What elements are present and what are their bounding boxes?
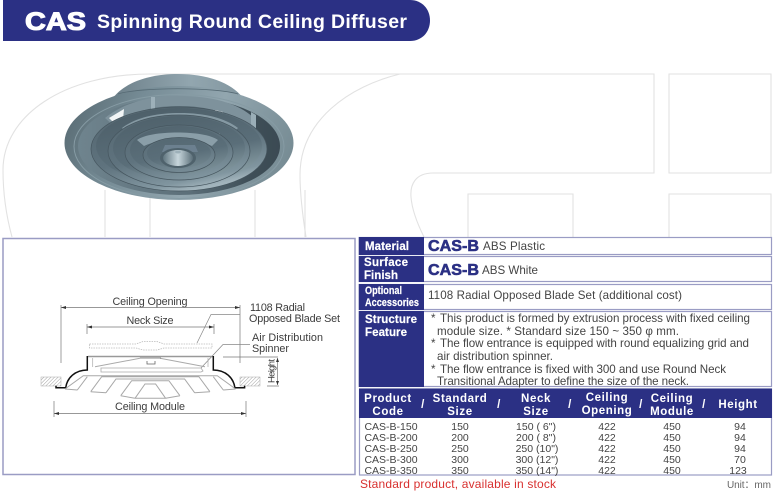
background watermark logo outline bbox=[3, 74, 771, 237]
table rows: 450 bbox=[663, 454, 681, 466]
table rows: 450 bbox=[663, 465, 681, 477]
air distribution spinner: Spinner bbox=[252, 343, 289, 355]
height dimension: Height bbox=[266, 359, 278, 383]
spec row: structure feature: Transitional Adapter to define the size of the neck. bbox=[437, 375, 689, 388]
table rows: 450 bbox=[663, 421, 681, 433]
table rows: 250 bbox=[451, 443, 469, 455]
table rows: 422 bbox=[598, 454, 616, 466]
product illustration: round ceiling diffuser bbox=[64, 74, 294, 200]
table rows: 300 bbox=[451, 454, 469, 466]
air distribution spinner bbox=[201, 332, 323, 368]
ceiling module dimension bbox=[54, 401, 246, 417]
spec row: material: CAS-B bbox=[428, 238, 479, 255]
table rows: 250 (10") bbox=[516, 443, 558, 455]
table rows: CAS-B-150 bbox=[364, 421, 418, 433]
concentric rings bbox=[91, 107, 267, 191]
spec row: optional accessories bbox=[359, 284, 772, 310]
panel: section drawing bbox=[3, 238, 355, 474]
radial opposed blade set: Opposed Blade Set bbox=[249, 313, 340, 325]
table rows: 123 bbox=[729, 465, 747, 477]
table header: / bbox=[568, 399, 572, 411]
table rows: 422 bbox=[598, 465, 616, 477]
table rows: 94 bbox=[734, 421, 746, 433]
table rows: 70 bbox=[734, 454, 746, 466]
spec row: material bbox=[359, 237, 772, 255]
spec row: structure feature: module size. * Standard size 150 ~ 350 φ mm. bbox=[437, 325, 679, 338]
spec row: surface finish: Finish bbox=[364, 270, 398, 282]
table rows: CAS-B-200 bbox=[364, 432, 418, 444]
spec row: surface finish: ABS White bbox=[482, 264, 538, 277]
spec row: surface finish: CAS-B bbox=[428, 262, 479, 279]
height dimension bbox=[223, 357, 279, 386]
upper fins bbox=[105, 96, 254, 128]
diffuser cross section bbox=[41, 356, 260, 398]
spec row: optional accessories: 1108 Radial Opposed Blade Set (additional cost) bbox=[428, 289, 682, 302]
spec row: structure feature: This product is formed by extrusion process with fixed ceiling bbox=[440, 312, 750, 325]
spec row: structure feature bbox=[359, 311, 772, 388]
table header: Ceiling bbox=[586, 392, 628, 404]
table rows: CAS-B-350 bbox=[364, 465, 418, 477]
unit note: Unit：mm bbox=[727, 480, 771, 491]
table rows: 150 ( 6") bbox=[516, 421, 556, 433]
spec row: optional accessories: Optional bbox=[365, 285, 402, 297]
ceiling opening dimension bbox=[61, 296, 240, 363]
spec row: structure feature: Structure bbox=[365, 314, 417, 326]
table rows: 350 (14") bbox=[516, 465, 558, 477]
table rows: CAS-B-300 bbox=[364, 454, 418, 466]
interior opening bbox=[78, 97, 280, 195]
spec row: material: Material bbox=[365, 241, 409, 253]
table rows: 422 bbox=[598, 443, 616, 455]
ceiling module dimension: Ceiling Module bbox=[115, 401, 185, 413]
outer rim bbox=[64, 86, 294, 200]
spec row: structure feature: Feature bbox=[365, 327, 407, 339]
table rows: 94 bbox=[734, 443, 746, 455]
table rows bbox=[364, 421, 747, 477]
title banner bbox=[3, 0, 430, 41]
table header: / bbox=[421, 399, 425, 411]
table header: Size bbox=[447, 406, 473, 418]
neck size dimension bbox=[87, 315, 214, 334]
table header: Module bbox=[650, 406, 694, 418]
table rows: 94 bbox=[734, 432, 746, 444]
radial opposed blade set bbox=[90, 302, 340, 350]
centre cone bbox=[160, 148, 196, 168]
specification table bbox=[359, 388, 772, 477]
product name: Spinning Round Ceiling Diffuser bbox=[97, 11, 407, 33]
table rows: 450 bbox=[663, 443, 681, 455]
spec row: structure feature: * bbox=[431, 312, 436, 325]
spec row: structure feature: The flow entrance is fixed with 300 and use Round Neck bbox=[440, 363, 726, 376]
table header bbox=[359, 388, 772, 418]
table header: / bbox=[497, 399, 501, 411]
table header: / bbox=[639, 399, 643, 411]
spec row: material: ABS Plastic bbox=[483, 240, 545, 253]
table rows: 350 bbox=[451, 465, 469, 477]
spec row: structure feature: * bbox=[431, 337, 436, 350]
ceiling opening dimension: Ceiling Opening bbox=[112, 296, 188, 308]
table rows: 422 bbox=[598, 432, 616, 444]
product code: CAS bbox=[25, 8, 86, 36]
table rows: CAS-B-250 bbox=[364, 443, 418, 455]
spec row: surface finish: Surface bbox=[364, 257, 408, 269]
table header: Height bbox=[718, 399, 758, 411]
spec row: surface finish bbox=[359, 256, 772, 282]
neck size dimension: Neck Size bbox=[126, 315, 174, 327]
table rows: 300 (12") bbox=[516, 454, 558, 466]
table header: Neck bbox=[521, 393, 551, 405]
table rows: 150 bbox=[451, 421, 469, 433]
spec row: structure feature: air distribution spinner. bbox=[437, 350, 553, 363]
table header: Opening bbox=[582, 405, 632, 417]
table header: Ceiling bbox=[651, 393, 693, 405]
table header: / bbox=[702, 399, 706, 411]
radial opposed blade set: 1108 Radial bbox=[250, 302, 305, 314]
stock note: Standard product, available in stock bbox=[360, 477, 557, 491]
table header: Standard bbox=[433, 393, 487, 405]
air distribution spinner: Air Distribution bbox=[252, 332, 323, 344]
collar bbox=[113, 74, 243, 98]
spec row: optional accessories: Accessories bbox=[365, 297, 419, 309]
table rows: 422 bbox=[598, 421, 616, 433]
table header: Size bbox=[523, 406, 549, 418]
table header: Product bbox=[364, 393, 412, 405]
spec row: structure feature: * bbox=[431, 363, 436, 376]
table rows: 200 bbox=[451, 432, 469, 444]
table header: Code bbox=[372, 406, 404, 418]
spec row: structure feature: The flow entrance is equipped with round equalizing grid and bbox=[440, 337, 749, 350]
table rows: 450 bbox=[663, 432, 681, 444]
table rows: 200 ( 8") bbox=[516, 432, 556, 444]
